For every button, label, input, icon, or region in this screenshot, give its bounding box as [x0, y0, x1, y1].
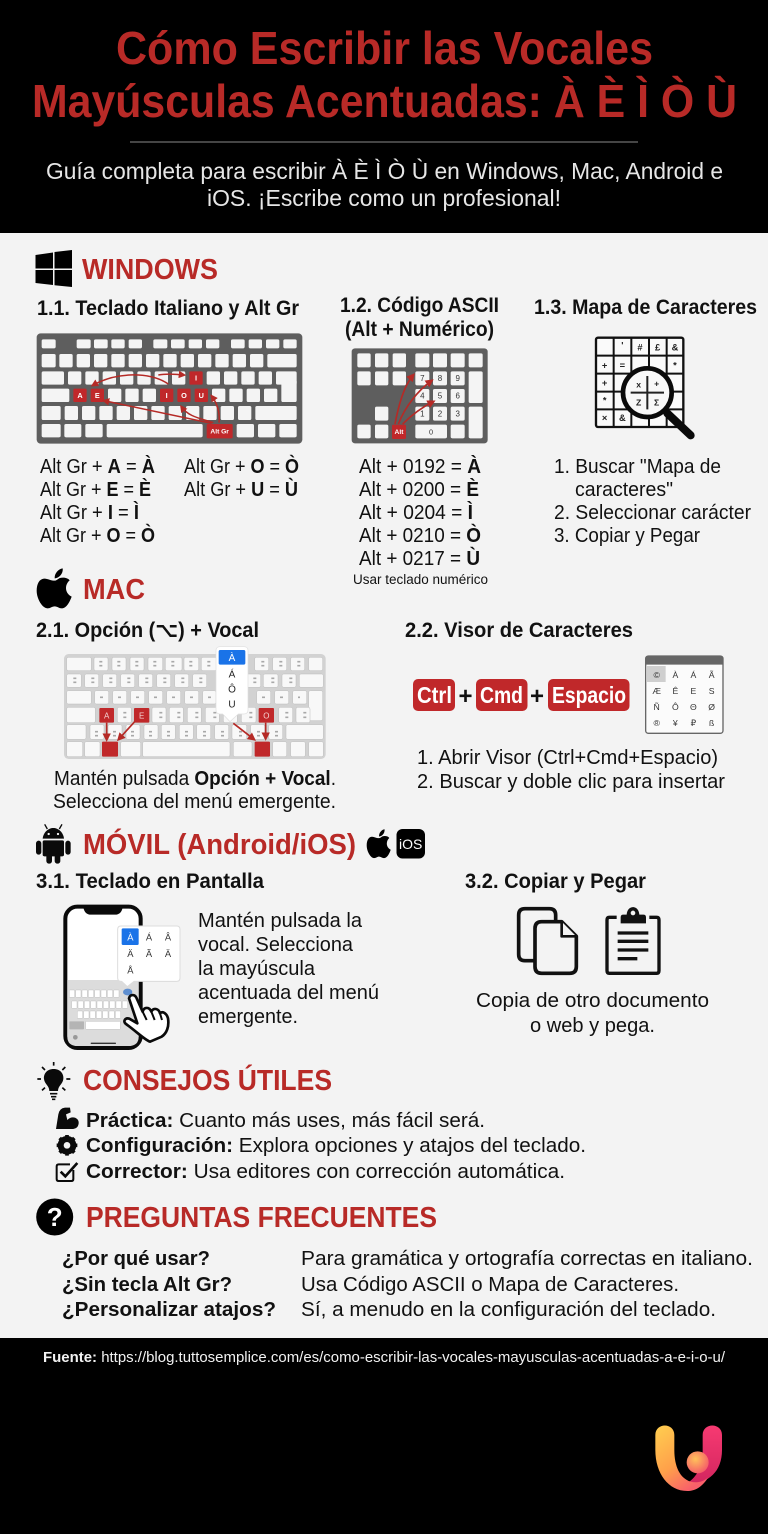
heading: 1.1: 1.1. Teclado Italiano y Alt Gr: [37, 297, 299, 320]
text: character map steps: caracteres": [575, 479, 673, 501]
logo: [655, 1425, 722, 1491]
popup: accent menu: U: [228, 700, 236, 711]
icon: iOS badge: iOS: [399, 836, 422, 852]
icon: character viewer window: ¥: [672, 718, 678, 728]
icon: character map with magnifier: Σ: [654, 398, 659, 408]
text: phone instructions: la mayúscula: [198, 958, 316, 980]
keyboard: numeric pad: 7: [420, 374, 425, 383]
FAQ questions: ¿Sin tecla Alt Gr?: [62, 1274, 232, 1296]
text: viewer steps: [417, 747, 725, 793]
icon: pointing hand: [124, 995, 168, 1042]
title: Mayúsculas Acentuadas: À È Ì Ò Ù: [32, 75, 737, 127]
header: title and subtitle: [32, 22, 737, 211]
popup: accent options: Ä: [165, 949, 172, 959]
popup: accent options: Á: [146, 933, 153, 943]
icon: copy documents: [519, 909, 576, 973]
illustration: phone with accent popup: [65, 907, 180, 1048]
key combo: Ctrl + Cmd + Espacio: +: [458, 683, 473, 710]
keyboard: numeric pad: 8: [438, 374, 443, 383]
icon: character map with magnifier: +: [602, 378, 608, 388]
text: ASCII codes: Alt + 0217 = Ù: [359, 546, 480, 570]
FAQ questions: [62, 1248, 276, 1321]
icon: character map with magnifier: #: [637, 343, 643, 353]
FAQ answers: Usa Código ASCII o Mapa de Caracteres.: [301, 1274, 679, 1296]
heading: 3.2: 3.2. Copiar y Pegar: [465, 870, 646, 893]
text: Alt Gr shortcuts: Alt Gr + I = Ì: [40, 501, 139, 524]
text: viewer steps: 2. Buscar y doble clic para insertar: [417, 771, 725, 793]
text: phone instructions: Mantén pulsada la: [198, 910, 363, 932]
subtitle: iOS. ¡Escribe como un profesional!: [207, 185, 561, 211]
heading: Mac: MAC: [83, 574, 145, 606]
icon: character viewer window: ß: [709, 718, 714, 728]
text: ASCII codes: Alt + 0200 = È: [359, 478, 479, 501]
key combo: Ctrl + Cmd + Espacio: Espacio: [552, 682, 626, 708]
keyboard: italian with Alt Gr: O: [181, 391, 187, 400]
icon: character viewer window: ₽: [691, 718, 697, 728]
icon: character map with magnifier: x: [636, 379, 641, 389]
keyboard: numeric pad: 5: [438, 392, 443, 401]
key combo: Ctrl + Cmd + Espacio: Ctrl: [417, 682, 452, 708]
text: character map steps: [554, 456, 751, 547]
icon: character viewer window: E: [690, 686, 696, 696]
keyboard: italian with Alt Gr: I: [195, 374, 197, 383]
text: Alt Gr shortcuts: Alt Gr + A = À: [40, 455, 155, 478]
text: tip corrector: Corrector: Usa editores con corrección automática.: [86, 1161, 565, 1183]
text: phone instructions: vocal. Selecciona: [198, 934, 354, 956]
popup: accent menu: Ô: [228, 683, 236, 696]
heading: 1.2: 1.2. Código ASCII: [340, 294, 499, 317]
subtitle: Guía completa para escribir À È Ì Ò Ù en Windows, Mac, Android e: [46, 158, 723, 184]
text: Alt Gr shortcuts: Alt Gr + O = Ò: [40, 523, 155, 547]
keyboard: italian with Alt Gr: A: [77, 391, 83, 400]
text: viewer steps: 1. Abrir Visor (Ctrl+Cmd+Espacio): [417, 747, 718, 769]
text: character map steps: 2. Seleccionar carácter: [554, 502, 751, 524]
popup: accent options: Â: [165, 933, 172, 943]
icon: iOS badge: [396, 829, 425, 858]
text: Alt Gr shortcuts: Alt Gr + E = È: [40, 478, 151, 501]
icon: android: [36, 824, 71, 864]
keyboard: italian with Alt Gr: Alt Gr: [210, 429, 229, 436]
keyboard: mac: [64, 647, 326, 759]
text: copy and paste: [476, 990, 709, 1037]
heading: 2.1: 2.1. Opción (⌥) + Vocal: [36, 619, 259, 642]
icon: character viewer window: Ã: [709, 670, 715, 680]
icon: character map with magnifier: +: [654, 379, 659, 389]
icon: light bulb: [37, 1062, 70, 1099]
keyboard: mac: A: [104, 711, 110, 720]
text: mac instructions: Mantén pulsada Opción + Vocal.: [54, 768, 336, 790]
icon: character viewer window: Æ: [652, 686, 661, 696]
icon: windows logo: [36, 250, 72, 287]
icon: character map with magnifier: ×: [602, 413, 608, 423]
text: ASCII codes: [353, 455, 488, 587]
icon: character viewer window: ®: [653, 718, 660, 728]
icon: character viewer window: À: [672, 670, 678, 680]
keyboard: italian with Alt Gr: I: [166, 391, 168, 400]
keyboard: numeric pad: 3: [455, 409, 460, 418]
text: mac instructions: [53, 768, 336, 813]
icon: character map with magnifier: ': [621, 340, 623, 350]
icon: character map with magnifier: £: [655, 343, 661, 353]
popup: accent options: Å: [127, 965, 134, 975]
text: character map steps: 3. Copiar y Pegar: [554, 525, 700, 547]
text: ASCII codes: Alt + 0204 = Ì: [359, 501, 473, 524]
heading: 1.2: [340, 294, 499, 341]
icon: character viewer window: Θ: [690, 702, 697, 712]
icon: character map with magnifier: [596, 338, 691, 435]
text: character map steps: 1. Buscar "Mapa de: [554, 456, 721, 478]
keyboard: numeric pad: 0: [429, 427, 433, 436]
keyboard: numeric pad: Alt: [395, 429, 404, 436]
icon: apple logo: [37, 568, 72, 608]
heading: 3.1: 3.1. Teclado en Pantalla: [36, 870, 264, 893]
keyboard: mac: E: [139, 711, 144, 720]
icon: checkbox: [57, 1163, 77, 1181]
popup: accent menu: Á: [229, 667, 236, 680]
text: tip configuration: Configuración: Explora opciones y atajos del teclado.: [86, 1135, 586, 1157]
text: phone instructions: [198, 910, 379, 1028]
text: phone instructions: acentuada del menú: [198, 982, 379, 1004]
FAQ questions: ¿Personalizar atajos?: [62, 1299, 276, 1321]
text: tip practice: Práctica: Cuanto más uses, más fácil será.: [86, 1110, 485, 1132]
title: [32, 22, 737, 127]
text: phone instructions: emergente.: [198, 1006, 298, 1028]
icon: character map with magnifier: *: [673, 360, 677, 370]
keyboard: mac: O: [263, 711, 269, 720]
heading: mobile: MÓVIL (Android/iOS): [83, 827, 356, 861]
FAQ questions: ¿Por qué usar?: [62, 1248, 210, 1270]
icon: character viewer window: Ô: [672, 702, 679, 712]
icon: character viewer window: Ê: [672, 686, 678, 696]
text: Alt Gr shortcuts: Alt Gr + O = Ò: [184, 454, 299, 478]
keyboard: italian with Alt Gr: U: [199, 391, 204, 400]
heading: tips: CONSEJOS ÚTILES: [83, 1063, 332, 1097]
icon: character map with magnifier: &: [672, 343, 679, 353]
text: ASCII codes: Usar teclado numérico: [353, 572, 488, 587]
heading: 1.2: (Alt + Numérico): [345, 318, 494, 341]
icon: small apple: [367, 829, 391, 858]
keyboard: italian with Alt Gr: E: [95, 391, 100, 400]
title: Cómo Escribir las Vocales: [116, 22, 653, 74]
icon: character viewer window: [646, 656, 723, 733]
text: Alt Gr shortcuts: [40, 454, 299, 547]
text: copy and paste: Copia de otro documento: [476, 990, 709, 1012]
footer source: Fuente: https://blog.tuttosemplice.com/es/como-escribir-las-vocales-mayusculas-acentuadas-a-e-i-o-u/: [43, 1350, 726, 1366]
keyboard: numeric pad: 9: [455, 374, 460, 383]
popup: accent options: À: [127, 933, 134, 943]
FAQ answers: Para gramática y ortografía correctas en italiano.: [301, 1248, 753, 1270]
icon: character map with magnifier: +: [602, 360, 608, 370]
key combo: Ctrl + Cmd + Espacio: +: [530, 683, 544, 710]
text: mac instructions: Selecciona del menú emergente.: [53, 791, 336, 813]
heading: Windows: WINDOWS: [82, 254, 218, 286]
popup: accent options: [118, 926, 180, 987]
popup: accent menu: [216, 647, 248, 722]
keyboard: numeric pad: 6: [455, 392, 460, 401]
keyboard: italian with Alt Gr: [37, 333, 302, 444]
popup: accent options: Ã: [146, 949, 153, 959]
icon: character map with magnifier: =: [620, 360, 626, 370]
icon: character map with magnifier: *: [603, 395, 607, 405]
text: ASCII codes: Alt + 0210 = Ò: [359, 523, 481, 547]
popup: accent options: Ä: [127, 949, 134, 959]
heading: 2.2: 2.2. Visor de Caracteres: [405, 619, 633, 642]
key combo: Ctrl + Cmd + Espacio: [413, 679, 630, 711]
icon: gear: [57, 1135, 77, 1156]
keyboard: numeric pad: [352, 348, 488, 443]
icon: character viewer window: Ø: [708, 702, 715, 712]
FAQ answers: Sí, a menudo en la configuración del teclado.: [301, 1299, 716, 1321]
FAQ answers: [301, 1248, 753, 1321]
icon: clipboard: [607, 907, 659, 973]
keyboard: numeric pad: 2: [438, 409, 443, 418]
key combo: Ctrl + Cmd + Espacio: Cmd: [480, 682, 523, 708]
keyboard: numeric pad: 1: [420, 409, 425, 418]
icon: character map with magnifier: &: [619, 413, 626, 423]
text: Alt Gr shortcuts: Alt Gr + U = Ù: [184, 477, 298, 501]
icon: character map with magnifier: Z: [636, 398, 642, 408]
icon: bicep: [56, 1108, 79, 1129]
icon: character viewer window: Á: [690, 670, 696, 680]
icon: character viewer window: Ñ: [654, 702, 660, 712]
icon: question mark: [36, 1198, 73, 1236]
text: ASCII codes: Alt + 0192 = À: [359, 455, 481, 478]
heading: 1.3: 1.3. Mapa de Caracteres: [534, 296, 757, 319]
icon: question mark: ?: [47, 1202, 63, 1232]
heading: FAQ: PREGUNTAS FRECUENTES: [86, 1202, 437, 1234]
popup: accent menu: À: [229, 651, 236, 664]
keyboard: numeric pad: 4: [420, 392, 425, 401]
icon: character viewer window: S: [709, 686, 715, 696]
text: copy and paste: o web y pega.: [530, 1015, 655, 1037]
icon: character viewer window: ©: [653, 670, 660, 680]
subtitle: [46, 158, 723, 211]
